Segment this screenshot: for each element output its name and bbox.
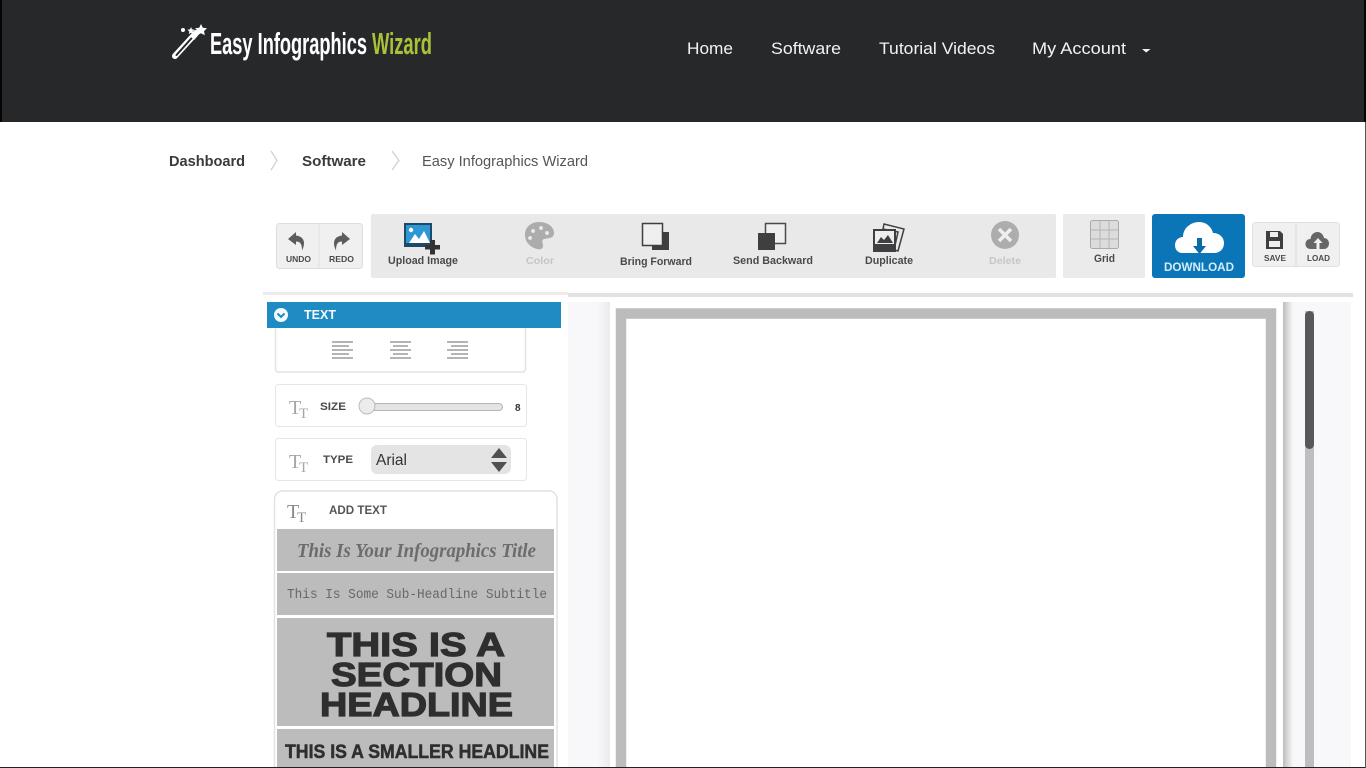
add text panel: ADD TEXT xyxy=(329,503,388,517)
size panel: T xyxy=(289,397,301,419)
label: upload image: Upload Image xyxy=(388,255,458,267)
icon: align right xyxy=(447,342,468,358)
text panel header xyxy=(267,302,561,328)
icon: undo xyxy=(288,232,304,250)
icon: colour palette xyxy=(525,222,554,249)
breadcrumb: Software xyxy=(302,153,366,170)
scrollbar xyxy=(1305,311,1314,768)
sample: smaller headline xyxy=(277,729,554,768)
breadcrumb xyxy=(169,151,588,170)
blank canvas sheet xyxy=(610,302,1283,768)
undo redo buttons xyxy=(276,224,362,268)
font dropdown xyxy=(371,445,511,474)
undo redo buttons: REDO xyxy=(329,254,354,264)
sample: title: This Is Your Infographics Title xyxy=(297,540,536,562)
logo wordmark: Easy Infographics xyxy=(210,26,367,61)
navigation: Software xyxy=(771,39,841,58)
save load buttons: LOAD xyxy=(1307,253,1330,263)
size panel: T xyxy=(299,406,308,422)
icon: upload image xyxy=(404,223,440,254)
size slider xyxy=(359,398,502,414)
label: send backward: Send Backward xyxy=(733,255,813,267)
undo redo buttons: UNDO xyxy=(286,254,311,264)
icon: duplicate xyxy=(873,224,904,252)
sample: section headline: SECTION xyxy=(331,656,502,693)
sample: smaller headline: THIS IS A SMALLER HEADLINE xyxy=(285,742,549,763)
sample: section headline: THIS IS A xyxy=(327,626,505,663)
save load buttons xyxy=(1252,222,1340,267)
font type panel xyxy=(276,438,526,480)
add text panel: T xyxy=(297,510,306,526)
navigation: Tutorial Videos xyxy=(879,39,995,58)
icon: bring forward xyxy=(642,224,669,250)
font type panel: T xyxy=(299,460,308,476)
size panel: SIZE xyxy=(320,401,346,413)
main toolbar xyxy=(371,214,1056,278)
sample: subtitle: This Is Some Sub-Headline Subtitle xyxy=(287,588,547,603)
navigation xyxy=(687,39,1150,58)
icon: chevron xyxy=(274,308,288,322)
add text panel xyxy=(274,491,557,768)
breadcrumb: Dashboard xyxy=(169,153,245,170)
sample: section headline xyxy=(277,618,554,726)
grid button xyxy=(1063,214,1145,278)
site header bar xyxy=(0,0,1366,122)
text panel header: TEXT xyxy=(304,307,336,322)
icon: cloud download xyxy=(1175,222,1224,254)
font type panel: T xyxy=(289,451,301,473)
icon: align center xyxy=(390,342,411,358)
icon: send backward xyxy=(758,224,786,250)
logo xyxy=(175,24,367,61)
label: delete: Delete xyxy=(989,255,1021,267)
breadcrumb: Easy Infographics Wizard xyxy=(422,153,588,170)
grid button: Grid xyxy=(1094,253,1115,265)
icon: save floppy xyxy=(1266,231,1283,249)
add text panel: T xyxy=(287,501,299,523)
font dropdown: Arial xyxy=(376,452,407,469)
icon: redo xyxy=(334,232,350,250)
icon: delete xyxy=(991,221,1019,249)
download button xyxy=(1152,214,1245,278)
icon: align left xyxy=(332,342,353,358)
sample: title xyxy=(277,529,554,571)
canvas workspace xyxy=(568,302,1351,768)
font type panel: TYPE xyxy=(323,454,353,466)
icon: load cloud xyxy=(1306,232,1329,249)
navigation: My Account xyxy=(1032,39,1126,58)
size panel xyxy=(276,384,526,426)
logo accent word: Wizard xyxy=(372,26,432,61)
sample: subtitle xyxy=(277,573,554,615)
label: color: Color xyxy=(526,255,554,267)
alignment panel xyxy=(276,328,526,372)
label: bring forward: Bring Forward xyxy=(620,256,692,268)
sample: section headline: HEADLINE xyxy=(320,686,513,723)
download button: DOWNLOAD xyxy=(1164,260,1234,274)
save load buttons: SAVE xyxy=(1264,253,1286,263)
label: duplicate: Duplicate xyxy=(865,255,913,267)
size panel: 8 xyxy=(515,403,521,414)
icon: magic wand xyxy=(175,24,207,56)
navigation: Home xyxy=(687,39,733,58)
